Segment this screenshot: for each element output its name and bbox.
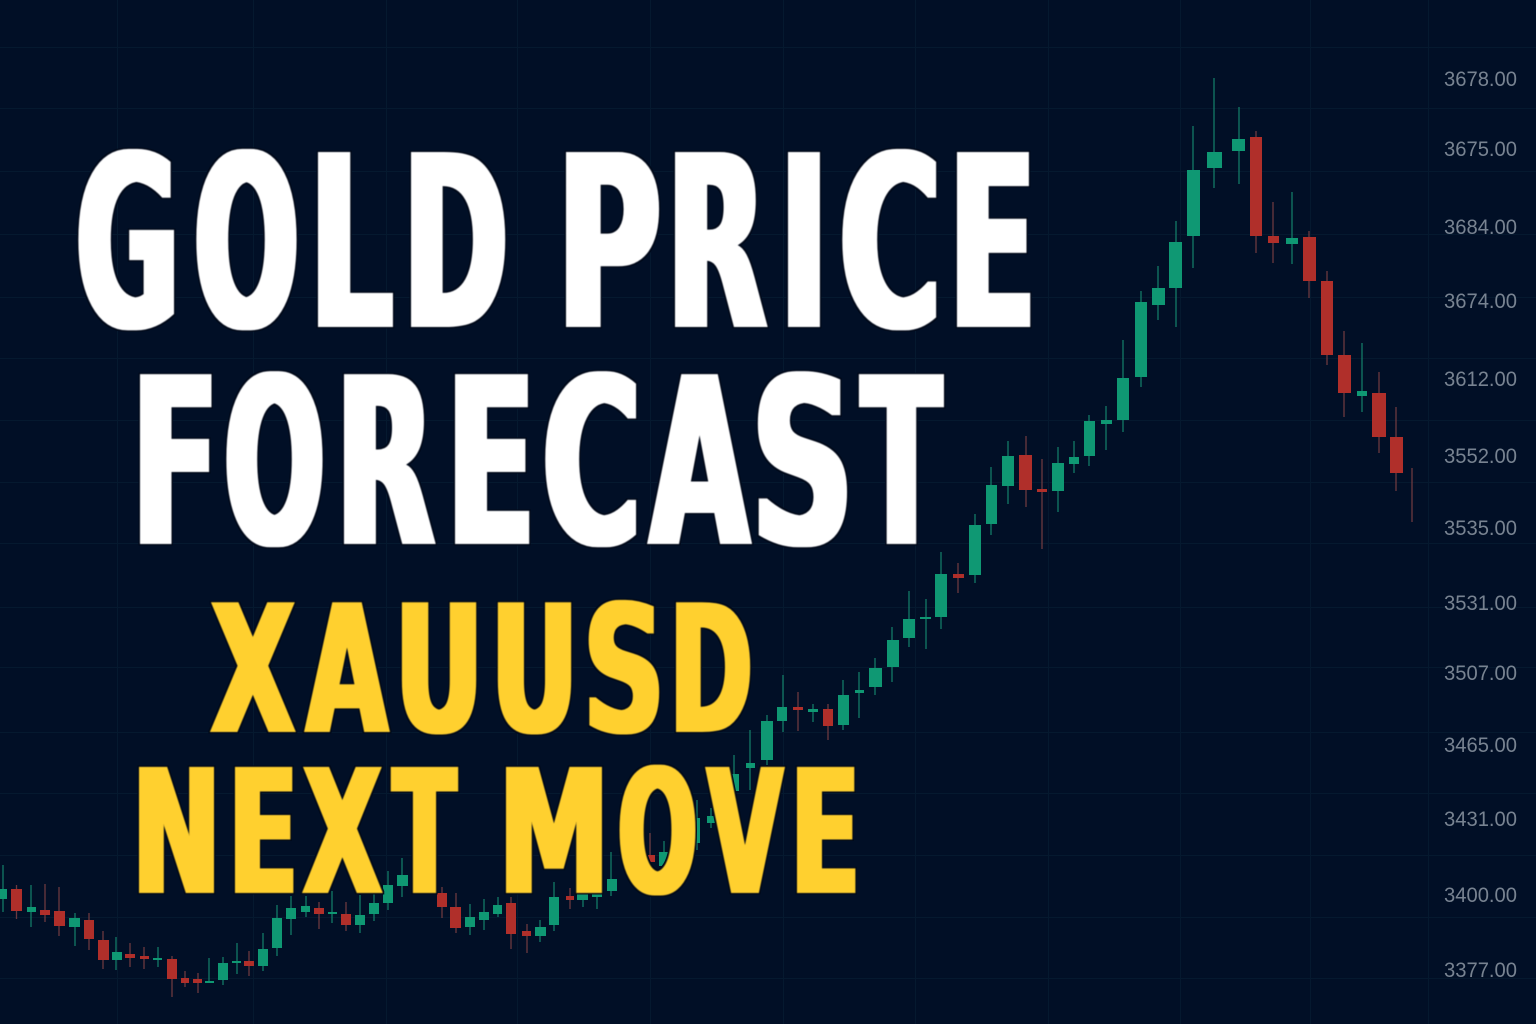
- title line: GOLD PRICE: R: [667, 104, 766, 384]
- price axis labels: 3377.00: [1444, 958, 1517, 982]
- subtitle line: NEXT MOVE: V: [708, 732, 783, 934]
- subtitle line: NEXT MOVE: X: [303, 732, 382, 934]
- price axis labels: 3678.00: [1444, 67, 1517, 91]
- title line: GOLD PRICE: P: [557, 104, 661, 384]
- price axis labels: 3531.00: [1444, 591, 1517, 615]
- subtitle line: XAUUSD: D: [670, 567, 752, 774]
- price axis labels: 3507.00: [1444, 661, 1517, 685]
- subtitle line: NEXT MOVE: E: [229, 732, 298, 934]
- price axis labels: 3684.00: [1444, 215, 1517, 239]
- price axis labels: 3552.00: [1444, 444, 1517, 468]
- price axis labels: 3674.00: [1444, 289, 1517, 313]
- subtitle line: NEXT MOVE: O: [618, 732, 697, 934]
- title line: GOLD PRICE: I: [780, 104, 828, 384]
- falling candles: [11, 131, 1412, 997]
- price axis labels: 3535.00: [1444, 516, 1517, 540]
- rising candles: [0, 78, 1367, 985]
- subtitle line: XAUUSD: U: [395, 567, 483, 774]
- title line: FORECAST: R: [336, 328, 434, 599]
- price axis labels: 3465.00: [1444, 733, 1517, 757]
- price axis labels: 3612.00: [1444, 367, 1517, 391]
- title line: FORECAST: S: [752, 328, 853, 599]
- title line: GOLD PRICE: E: [949, 104, 1036, 384]
- title line: GOLD PRICE: G: [76, 104, 179, 384]
- subtitle line: NEXT MOVE: T: [393, 732, 456, 934]
- title line: GOLD PRICE: D: [404, 104, 508, 384]
- title line: GOLD PRICE: L: [310, 104, 392, 384]
- subtitle line: NEXT MOVE: E: [791, 732, 860, 934]
- subtitle line: XAUUSD: X: [211, 567, 295, 774]
- title line: FORECAST: A: [650, 328, 749, 599]
- text: T: [862, 328, 941, 599]
- title line: GOLD PRICE: C: [839, 104, 941, 384]
- subtitle line: NEXT MOVE: N: [132, 732, 221, 934]
- subtitle line: XAUUSD: A: [306, 567, 388, 774]
- subtitle line: XAUUSD: U: [491, 567, 578, 774]
- title line: FORECAST: C: [543, 328, 641, 599]
- price axis labels: [1444, 67, 1517, 982]
- title line: GOLD PRICE: O: [194, 104, 299, 384]
- title line: FORECAST: E: [447, 328, 535, 599]
- price axis labels: 3400.00: [1444, 883, 1517, 907]
- subtitle line: NEXT MOVE: M: [499, 732, 609, 934]
- price axis labels: 3675.00: [1444, 137, 1517, 161]
- price axis labels: 3431.00: [1444, 807, 1517, 831]
- subtitle line: XAUUSD: S: [584, 567, 664, 774]
- title line: FORECAST: F: [132, 328, 218, 599]
- title line: FORECAST: O: [224, 328, 324, 599]
